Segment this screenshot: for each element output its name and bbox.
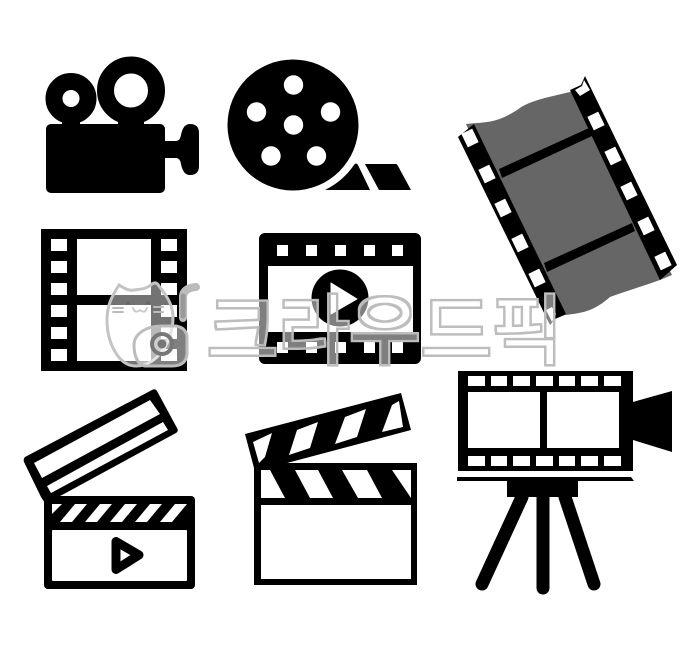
icon: vertical film strip bbox=[41, 229, 187, 371]
icon: video strip with play button bbox=[259, 233, 421, 364]
icon: film camera on tripod bbox=[457, 371, 672, 588]
icon: striped clapperboard bbox=[245, 393, 417, 585]
icon: tilted grey film strip bbox=[458, 76, 677, 325]
watermark: Korean wordmark: 크라우드픽 bbox=[207, 290, 563, 375]
icon: film reel bbox=[228, 60, 411, 190]
icon: outlined clapperboard with play symbol bbox=[24, 389, 195, 589]
watermark: cat mascot with camera bbox=[107, 283, 196, 366]
icon: movie camera silhouette bbox=[46, 65, 199, 193]
